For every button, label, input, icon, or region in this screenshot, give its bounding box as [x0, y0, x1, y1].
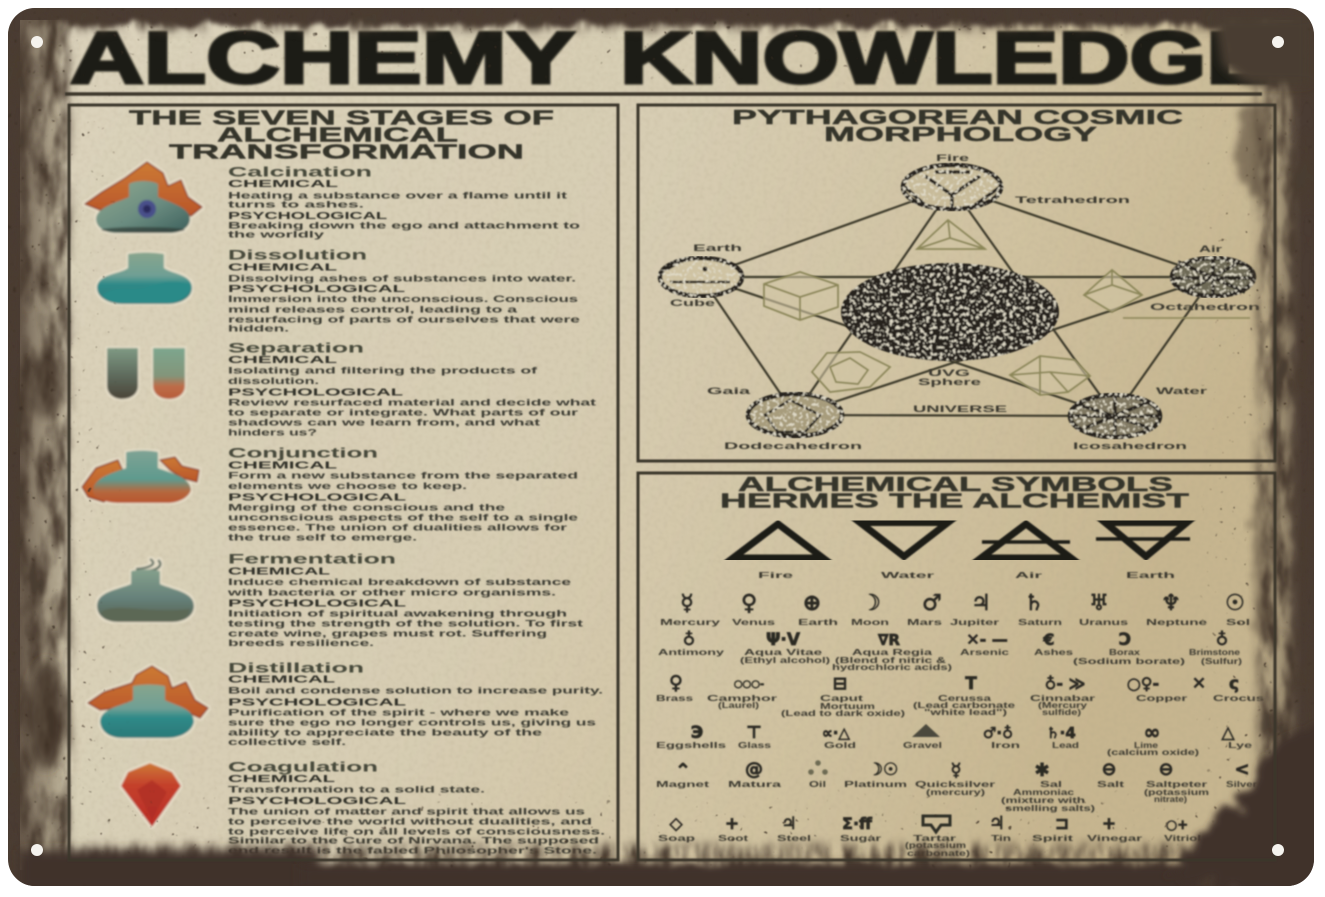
symbol row 2: ♁	[683, 630, 695, 650]
symbol row 6: Soot	[718, 834, 749, 843]
title rule and panel frames	[65, 94, 1275, 860]
diagram labels	[670, 153, 1260, 452]
symbol row 5: nitrate)	[1154, 795, 1187, 804]
icon: separation test tubes	[107, 348, 185, 399]
panel heading: seven stages: THE SEVEN STAGES OF	[129, 108, 554, 130]
symbol row 4: ♄·4	[1046, 724, 1076, 742]
symbol row 6: ⊐	[1055, 814, 1069, 834]
panel heading: seven stages: ALCHEMICAL	[217, 124, 458, 146]
diagram: node dodecahedron	[748, 394, 842, 436]
symbol row 5: @	[745, 759, 763, 780]
text block: separation	[228, 340, 598, 438]
text block: coagulation: PSYCHOLOGICAL	[228, 796, 406, 807]
symbol row 5: Matura	[728, 780, 782, 789]
icon: conjunction flask with flames	[82, 450, 199, 503]
symbol row 5: Ammoniac	[1013, 788, 1075, 797]
text block: conjunction: Merging of the conscious and the	[228, 502, 505, 514]
symbol row 6: (potassium	[905, 841, 966, 850]
diagram labels: Dodecahedron	[724, 441, 862, 452]
text block: fermentation: CHEMICAL	[228, 566, 330, 578]
element labels: Earth	[1126, 571, 1175, 580]
symbol row 3: (Mercury	[1038, 701, 1088, 710]
symbol row 3: Brass	[656, 694, 694, 703]
panel heading: seven stages: TRANSFORMATION	[169, 142, 524, 164]
symbol row 2: ✕- —	[966, 630, 1008, 649]
text block: separation: Review resurfaced material and decide what	[228, 398, 598, 408]
text block: separation: to separate or integrate. What parts of our	[228, 408, 579, 418]
symbol row 3: T	[965, 674, 977, 694]
diagram labels: Octahedron	[1150, 302, 1260, 313]
text block: calcination: PSYCHOLOGICAL	[228, 211, 387, 222]
panel heading: pythagorean: MORPHOLOGY	[824, 124, 1098, 146]
symbol row 3: (Lead carbonate	[913, 701, 1016, 710]
text block: fermentation: Induce chemical breakdown of substance	[228, 577, 571, 588]
text block: calcination	[228, 164, 580, 240]
symbol row 4: ⊤	[746, 723, 762, 743]
symbol row 6: +	[725, 814, 739, 834]
symbol row 3: (Laurel)	[718, 701, 759, 710]
symbol row 5: Quicksilver	[915, 780, 995, 789]
symbol row 3: Crocus	[1213, 694, 1265, 703]
text block: coagulation: to perceive life on all levels of consciousness.	[228, 826, 605, 838]
text block: fermentation: create wine, grapes must rot. Suffering	[228, 628, 547, 640]
icon: distillation flask with flames	[88, 666, 208, 738]
text block: dissolution: resurfacing of parts of ourselves that were	[228, 314, 580, 326]
symbol row 2: Borax	[1109, 648, 1141, 657]
symbol row 4: Э	[691, 723, 703, 743]
symbol row 1: planets: ⊕	[803, 591, 821, 616]
text block: calcination: turns to ashes.	[228, 200, 364, 210]
text block: fermentation: breeds resilience.	[228, 638, 374, 649]
symbol row 5: (mixture with	[1001, 796, 1085, 805]
symbol row 5: ⊖	[1101, 759, 1117, 780]
symbol row 4	[656, 720, 1253, 757]
diagram labels: Gaia	[707, 386, 751, 397]
symbol row 6: Tartar	[913, 834, 956, 843]
diagram: small olive polyhedra	[764, 220, 1142, 395]
diagram labels: UVG	[928, 368, 970, 379]
diagram labels: Air	[1199, 244, 1223, 255]
symbol row 3: Caput	[820, 694, 864, 703]
symbol row 1: planets: ☿	[680, 591, 694, 616]
symbol row 6: ○+	[1166, 818, 1188, 833]
diagram labels: Sphere	[918, 377, 981, 388]
text block: distillation: PSYCHOLOGICAL	[228, 698, 406, 708]
symbol row 4: Gold	[824, 741, 856, 750]
text block: conjunction: Form a new substance from the separated	[228, 470, 578, 482]
symbol row 5: Salt	[1097, 780, 1125, 789]
symbol row 6: Vinegar	[1087, 834, 1142, 843]
text block: fermentation	[226, 550, 585, 649]
symbol row 4: ♂·♁	[983, 724, 1013, 742]
symbol row 3: ○♀-	[1127, 674, 1159, 693]
symbol row 2: Ψ·V	[766, 630, 801, 650]
symbol row 1: planets: ♃	[971, 591, 991, 616]
diagram labels: Cube	[670, 298, 715, 309]
symbol row 5: smelling salts)	[1005, 804, 1096, 813]
text block: fermentation: Fermentation	[228, 550, 396, 566]
symbol row 2: ♁	[1216, 630, 1228, 650]
symbol row 1: planets: Mercury	[660, 618, 721, 627]
symbol row 1: planets: ☽	[861, 591, 881, 616]
text block: distillation: Distillation	[228, 660, 364, 676]
diagram labels: Earth	[693, 243, 742, 254]
symbol row 5: (mercury)	[926, 788, 986, 797]
symbol row 5: ✱	[1034, 760, 1050, 781]
symbol row 4: ∝·△	[822, 724, 850, 742]
text block: separation: Separation	[228, 340, 364, 356]
text block: separation: CHEMICAL	[228, 355, 337, 366]
text block: conjunction: elements we choose to keep.	[228, 481, 467, 492]
icons: four element triangles	[733, 522, 1190, 558]
text block: coagulation: end result is the fabled Philosopher's Stone.	[228, 846, 597, 856]
symbol row 1: planets: ♄	[1024, 591, 1044, 616]
symbol row 3: sulfide)	[1042, 708, 1081, 717]
symbol row 5: ⊖	[1158, 759, 1174, 780]
symbol row 1: planets: Jupiter	[950, 618, 999, 627]
symbol row 2: (Sodium borate)	[1073, 657, 1186, 666]
symbol row 1: planets: Uranus	[1079, 618, 1129, 627]
element labels: Fire	[758, 571, 794, 580]
element labels: Water	[881, 571, 934, 580]
element labels	[758, 571, 1175, 580]
text block: dissolution	[228, 246, 580, 334]
text block: coagulation: to perceive the world without dualities, and	[228, 816, 592, 828]
symbol row 1: planets: ♀	[741, 591, 757, 616]
symbol row 4: Glass	[738, 741, 772, 750]
diagram labels: Water	[1156, 386, 1208, 397]
symbol row 5: Saltpeter	[1146, 780, 1207, 789]
text block: coagulation: The union of matter and spirit that allows us	[228, 806, 585, 818]
text block: dissolution: hidden.	[228, 324, 289, 334]
symbol row 5: ⌃	[675, 760, 691, 782]
diagram: node icosahedron	[1070, 395, 1160, 437]
symbol row 4: Lye	[1228, 741, 1253, 750]
symbol row 6: ♃	[989, 813, 1005, 834]
symbol row 3	[656, 672, 1265, 718]
symbol row 3: ⊟	[833, 674, 847, 694]
symbol row 2: Brimstone	[1189, 648, 1241, 657]
diagram labels: Icosahedron	[1073, 441, 1187, 452]
symbol row 3: Copper	[1136, 694, 1187, 703]
diagram: pentagram connecting lines	[701, 187, 1213, 416]
symbol row 6: +	[1102, 814, 1116, 834]
text block: fermentation: PSYCHOLOGICAL	[228, 598, 406, 610]
text block: conjunction: the true self to emerge.	[228, 532, 417, 544]
title	[70, 18, 1272, 99]
symbol row 6: Steel	[777, 834, 811, 843]
symbol row 2: Aqua Vitae	[744, 648, 823, 657]
symbol row 3: ♀	[669, 672, 683, 694]
symbol row 5: ☽☉	[868, 760, 898, 780]
symbol row 1: planets: Saturn	[1018, 618, 1062, 627]
symbol row 1: planets: ♆	[1161, 591, 1181, 616]
symbol row 6: Σ·ff	[842, 814, 873, 833]
symbol row 3: "white lead")	[924, 708, 1008, 717]
diagram labels: Fire	[936, 153, 969, 164]
text block: coagulation: Coagulation	[228, 758, 378, 774]
text block: coagulation: Transformation to a solid state.	[228, 784, 485, 796]
symbol row 3: Mortuum	[820, 702, 875, 711]
symbol row 6	[658, 813, 1201, 858]
diagram labels: Tetrahedron	[1015, 195, 1130, 206]
text block: fermentation: testing the strength of the solution. To first	[228, 618, 585, 630]
text block: coagulation	[228, 758, 605, 856]
text block: dissolution: mind releases control, leading to a	[228, 304, 518, 316]
symbol row 5: Platinum	[844, 780, 907, 789]
symbol row 1: planets: Neptune	[1146, 618, 1208, 627]
text block: fermentation: Initiation of spiritual awakening through	[228, 608, 567, 620]
text block: separation: Isolating and filtering the products of	[228, 366, 539, 376]
diagram: node octahedron (air)	[1172, 258, 1254, 296]
symbol row 2: (Ethyl alcohol)	[740, 656, 831, 665]
symbol row 3: (Lead to dark oxide)	[781, 709, 906, 718]
text block: coagulation: CHEMICAL	[228, 774, 335, 785]
symbol row 6: Vitriol	[1164, 834, 1201, 843]
symbol row 2: hydrochloric acids)	[832, 663, 953, 672]
text block: conjunction	[228, 444, 578, 544]
panel heading: alchemical symbols: HERMES THE ALCHEMIST	[720, 490, 1189, 512]
panel heading: seven stages	[129, 108, 554, 164]
text block: dissolution: CHEMICAL	[228, 262, 337, 274]
symbol row 5: (potassium	[1144, 788, 1209, 797]
symbol row 4: Lead	[1052, 741, 1079, 750]
text block: calcination: CHEMICAL	[228, 179, 338, 190]
panel heading: pythagorean	[732, 107, 1183, 146]
symbol row 5: Oil	[809, 780, 826, 789]
text block: separation: hinders us?	[228, 428, 317, 438]
symbol row 2: Arsenic	[960, 648, 1010, 657]
symbol row 1: planets: Venus	[732, 618, 776, 627]
diagram: node tetrahedron (fire)	[903, 165, 1001, 209]
symbol row 1: planets: ♅	[1089, 591, 1109, 616]
symbol row 2: €	[1042, 630, 1055, 649]
symbol row 2: Antimony	[658, 648, 725, 657]
symbol row 5: Sal	[1040, 780, 1062, 789]
symbol row 3: ς	[1229, 674, 1239, 694]
icon: calcination flask with flames	[85, 162, 202, 233]
diagram: central UVG sphere	[842, 264, 1058, 360]
text block: conjunction: essence. The union of dualities allows for	[228, 522, 568, 534]
symbol row 5: Silver	[1226, 780, 1257, 789]
panel: pythagorean cosmic morphology	[660, 107, 1260, 452]
text block: distillation: Purification of the spirit - where we make	[228, 708, 569, 718]
symbol row 4: Gravel	[903, 741, 942, 750]
symbol row 2: (Sulfur)	[1201, 657, 1242, 666]
text block: distillation: ability to appreciate the beauty of the	[228, 728, 542, 738]
symbol row 2: (Blend of nitric &	[835, 656, 946, 665]
symbol row 4: Eggshells	[656, 741, 727, 750]
text block: separation: dissolution.	[228, 376, 319, 387]
icon: dissolution flask	[97, 252, 192, 304]
symbol row 6: Soap	[658, 834, 695, 843]
diagram: node cube (earth)	[660, 258, 742, 296]
panel heading: alchemical symbols: ALCHEMICAL SYMBOLS	[738, 474, 1173, 496]
symbol row 4: △	[1221, 723, 1235, 743]
symbol row 3: ♁- ≫	[1045, 674, 1085, 693]
symbol row 1: planets: Sol	[1226, 618, 1250, 627]
symbol row 6: Spirit	[1032, 834, 1074, 843]
symbol row 3: Cerussa	[938, 694, 992, 703]
symbol row 4: ∞	[1144, 720, 1160, 744]
symbol row 6: carbonate)	[907, 849, 971, 858]
text block: distillation	[228, 660, 603, 748]
symbol row 4: Iron	[991, 741, 1020, 750]
symbol row 1: planets: Earth	[798, 618, 838, 627]
symbol row 6: Sugar	[840, 834, 881, 843]
symbol row 1: planets: Mars	[907, 618, 943, 627]
panel: alchemical symbols	[656, 474, 1265, 858]
text block: calcination: Heating a substance over a flame until it	[228, 190, 569, 202]
text block: conjunction: Conjunction	[228, 444, 378, 460]
text block: coagulation: Similar to the Cure of Nirvana. The supposed	[228, 836, 599, 846]
text block: fermentation: with bacteria or other micro organisms.	[226, 588, 556, 598]
text block: dissolution: Dissolving ashes of substances into water.	[228, 274, 576, 284]
symbol row 5	[656, 759, 1257, 813]
symbol row 2: ∇R	[878, 631, 900, 649]
symbol row 5: Magnet	[656, 780, 710, 789]
icon: fermentation flask with vapour	[97, 559, 194, 622]
icon: coagulation red gem	[121, 763, 181, 827]
panel heading: pythagorean: PYTHAGOREAN COSMIC	[732, 107, 1183, 129]
text block: conjunction: CHEMICAL	[228, 460, 337, 472]
symbol row 2: Ashes	[1034, 648, 1074, 657]
panel heading: alchemical symbols	[720, 474, 1189, 512]
symbol row 6: ◇	[669, 814, 683, 834]
symbol row 2: Ɔ	[1119, 630, 1131, 650]
element labels: Air	[1015, 571, 1042, 580]
symbol row 6: ♃	[781, 814, 797, 834]
symbol row 1: planets: ☉	[1225, 591, 1245, 616]
symbol row 1: planets	[660, 591, 1250, 627]
text block: dissolution: Dissolution	[228, 246, 367, 262]
panel: seven stages of alchemical transformation	[82, 108, 605, 856]
symbol row 3: ✕	[1192, 674, 1206, 694]
symbol row 4: (calcium oxide)	[1107, 748, 1200, 757]
text block: calcination: Breaking down the ego and attachment to	[228, 220, 580, 232]
diagram labels: UNIVERSE	[913, 404, 1007, 415]
text block: dissolution: PSYCHOLOGICAL	[228, 284, 405, 295]
text block: calcination: the worldly	[228, 230, 325, 240]
symbol row 1: planets: Moon	[851, 618, 889, 627]
symbol row 2	[658, 630, 1242, 672]
symbol row 6: Tin	[991, 834, 1011, 843]
symbol row 3: Cinnabar	[1030, 694, 1095, 703]
text block: distillation: sure the ego no longer controls us, giving us	[228, 718, 596, 728]
text block: calcination: Calcination	[228, 164, 372, 180]
symbol row 2: Aqua Regia	[852, 648, 933, 657]
title: KNOWLEDGE	[620, 18, 1272, 99]
symbol row 5: ☿	[950, 760, 962, 781]
text block: conjunction: PSYCHOLOGICAL	[228, 492, 406, 504]
text block: conjunction: unconscious aspects of the self to a single	[228, 512, 578, 524]
text block: separation: PSYCHOLOGICAL	[228, 388, 403, 398]
text block: distillation: collective self.	[228, 737, 346, 748]
text block: distillation: Boil and condense solution to increase purity.	[228, 686, 603, 696]
title: ALCHEMY	[70, 18, 575, 99]
text block: separation: shadows can we learn from, and what	[228, 418, 542, 428]
symbol row 3: ○○○-	[734, 679, 764, 690]
text block: dissolution: Immersion into the unconscious. Conscious	[228, 294, 578, 305]
symbol row 4: Lime	[1134, 741, 1159, 750]
text block: distillation: CHEMICAL	[228, 674, 335, 686]
symbol row 5: <	[1234, 759, 1250, 780]
symbol row 3: Camphor	[707, 694, 777, 703]
symbol row 1: planets: ♂	[922, 591, 942, 616]
